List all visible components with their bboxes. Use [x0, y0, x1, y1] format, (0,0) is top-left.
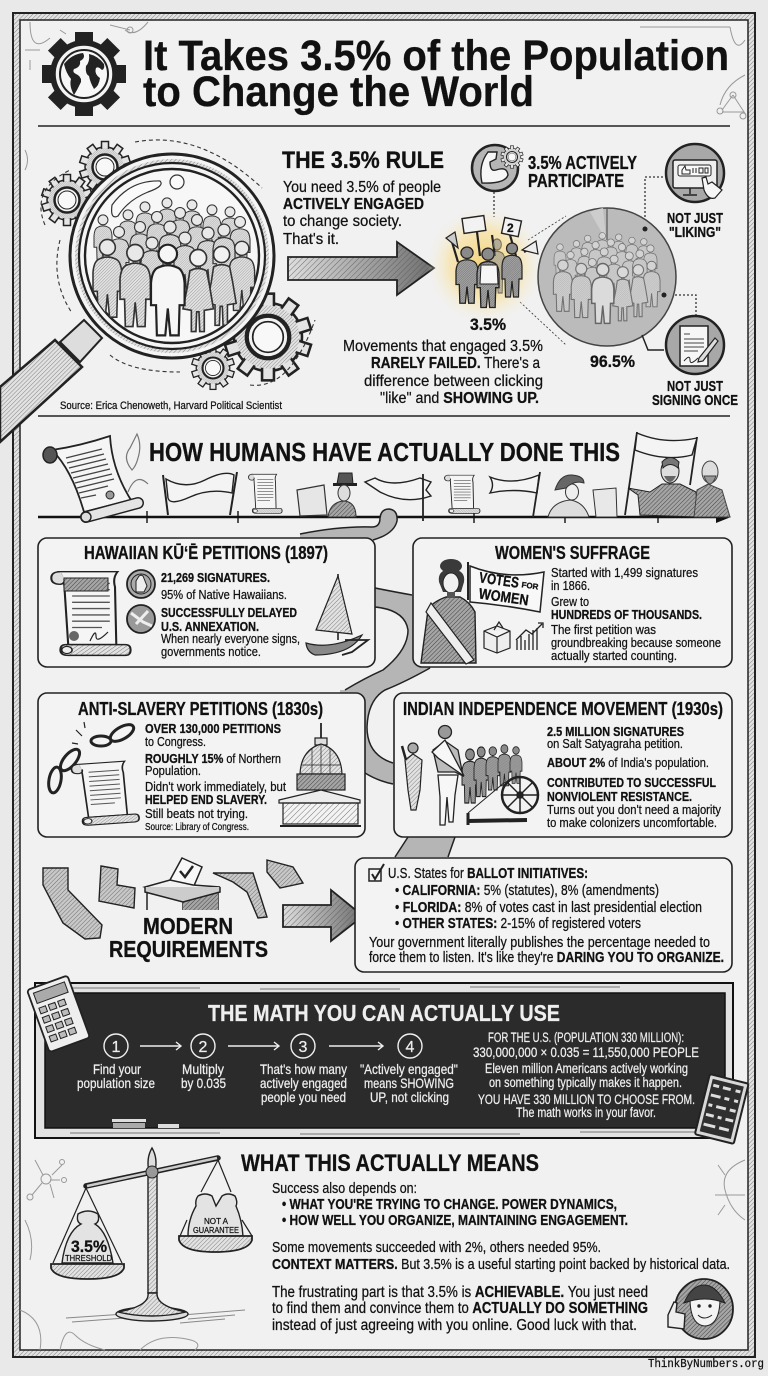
step numbers: 4: [406, 1039, 415, 1056]
icon: spinning wheel: [467, 777, 538, 825]
icon: colonial character with thumbs up: [668, 1279, 733, 1339]
label: not just signing once: SIGNING ONCE: [652, 392, 738, 409]
text block: context: Some movements succeeded with 2%, others needed 95%.: [272, 1239, 601, 1256]
calculation block: The math works in your favor.: [516, 1105, 656, 1120]
text block: depends on: • HOW WELL YOU ORGANIZE, MAINTAINING ENGAGEMENT.: [282, 1212, 628, 1229]
icon: handshake: [127, 605, 155, 633]
step captions: Find your: [93, 1061, 141, 1077]
calculation block: [473, 1030, 699, 1120]
text block: [547, 724, 721, 830]
source: Source: Erica Chenoweth, Harvard Political Scientist: [60, 400, 282, 412]
balance scale illustration: [51, 1148, 252, 1323]
heading: THE MATH YOU CAN ACTUALLY USE: [208, 1000, 560, 1026]
chalkboard panel: [27, 975, 749, 1144]
heading: ANTI-SLAVERY PETITIONS (1830s): [78, 699, 323, 719]
text block: HELPED END SLAVERY.: [145, 792, 267, 807]
text block: movements: Movements that engaged 3.5%: [343, 338, 543, 355]
step captions: actively engaged: [260, 1075, 347, 1091]
title: It Takes 3.5% of the Population: [143, 32, 729, 80]
text block: rule: [283, 179, 441, 248]
text block: SUCCESSFULLY DELAYED: [161, 605, 297, 620]
text block: movements: "like" and SHOWING UP.: [380, 390, 539, 407]
icon: left weight and pan: 3.5%: [71, 1237, 107, 1256]
heading: WOMEN'S SUFFRAGE: [495, 543, 650, 563]
panel: anti-slavery petitions: [38, 693, 365, 837]
icon: left weight and pan: [51, 1188, 124, 1279]
label: 3.5%: 3.5%: [470, 315, 506, 334]
heading: REQUIREMENTS: [109, 936, 268, 962]
banner: votes for women: [468, 562, 544, 612]
text: 3.5% actively participate: PARTICIPATE: [528, 171, 624, 191]
label: not just liking: NOT JUST: [667, 210, 723, 227]
text block: Turns out you don't need a majority: [547, 802, 721, 817]
banner: votes for women: WOMEN: [478, 586, 530, 609]
text block: rule: ACTIVELY ENGAGED: [283, 196, 424, 213]
header: logo and title: to Change the World: [143, 68, 534, 116]
text block: context: [272, 1239, 730, 1273]
panel: Hawaiian petitions: [38, 538, 375, 667]
panel: ballot initiatives: [355, 858, 732, 972]
text block: When nearly everyone signs,: [161, 631, 300, 646]
text block: groundbreaking because someone: [551, 635, 721, 650]
heading: WHAT THIS ACTUALLY MEANS: [241, 1150, 539, 1177]
text block: on Salt Satyagraha petition.: [547, 736, 683, 751]
text block: rule: to change society.: [283, 213, 402, 230]
text block: [145, 721, 286, 833]
timeline axis: [38, 511, 731, 523]
text block: U.S. ANNEXATION.: [161, 619, 259, 634]
header: logo and title: [42, 32, 729, 116]
text block: depends on: Success also depends on:: [272, 1180, 417, 1197]
label: 96.5%: 96.5%: [590, 352, 635, 371]
step captions: population size: [77, 1075, 155, 1091]
text block: frustrating part: [272, 1284, 648, 1334]
text block: The first petition was: [551, 622, 656, 637]
arrow: [283, 890, 363, 941]
text block: Your government literally publishes the percentage needed to: [369, 935, 710, 951]
text block: to Congress.: [145, 734, 206, 749]
step captions: UP, not clicking: [370, 1089, 449, 1105]
text block: Started with 1,499 signatures: [551, 565, 698, 580]
icon: abacus: [695, 1074, 749, 1144]
icon: capitol building: [279, 723, 361, 826]
calculation block: on something typically makes it happen.: [489, 1075, 682, 1090]
icon: scroll 2: [249, 474, 282, 513]
text block: ABOUT 2% of India's population.: [547, 755, 709, 770]
icon: scroll 4: [445, 475, 480, 513]
icon: gear with globe: [42, 32, 126, 116]
label: not just liking: [667, 210, 723, 241]
text block: 2.5 MILLION SIGNATURES: [547, 724, 684, 739]
icon: magnifying glass over crowd: [0, 154, 274, 442]
step captions: Multiply: [182, 1061, 224, 1077]
icon: ballot box: [484, 622, 510, 653]
icon: large scroll: [43, 436, 138, 522]
steps: [104, 1034, 422, 1058]
icon: man with document: [297, 473, 357, 517]
timeline section: [38, 432, 731, 523]
banner: votes for women: VOTES: [478, 569, 520, 592]
step captions: people you need: [261, 1089, 346, 1105]
step captions: means SHOWING: [364, 1075, 454, 1091]
winding river behind the cards: [300, 509, 455, 857]
heading: MODERN: [143, 913, 233, 939]
text block: actually started counting.: [551, 648, 677, 663]
icon: right weight and pan: NOT A: [204, 1217, 229, 1226]
icon: flag 5: [490, 472, 540, 517]
text block: • OTHER STATES: 2-15% of registered voters: [395, 916, 641, 932]
icon: protesters 3.5%: 2: [507, 221, 514, 235]
calculation block: 330,000,000 × 0.035 = 11,550,000 PEOPLE: [473, 1045, 699, 1060]
heading: [109, 913, 268, 962]
text block: U.S. States for BALLOT INITIATIVES:: [388, 866, 588, 882]
text block: Didn't work immediately, but: [145, 779, 286, 794]
step numbers: 3: [299, 1039, 308, 1056]
icon: marchers: [462, 745, 522, 803]
icon: companion walker: [402, 743, 422, 810]
text block: ROUGHLY 15% of Northern: [145, 751, 281, 766]
heading: HOW HUMANS HAVE ACTUALLY DONE THIS: [149, 437, 620, 467]
icon: calculator: [27, 975, 90, 1052]
icon: petition scroll: [71, 760, 139, 826]
label: not just signing once: NOT JUST: [667, 378, 723, 395]
step captions: That's how many: [260, 1061, 347, 1077]
icon: thumbs-up on monitor: [666, 144, 724, 202]
icon: ballot box: [145, 858, 220, 910]
label: not just liking: "LIKING": [669, 224, 721, 241]
icon: broken chain: [47, 721, 136, 794]
icon: flexed arm and gear: [472, 145, 523, 191]
connector lines: [494, 177, 696, 345]
icon: signed document: [666, 316, 724, 374]
text block: Population.: [145, 763, 201, 778]
text: 3.5% actively participate: [528, 153, 637, 191]
icon: flame sketch: [126, 434, 148, 492]
calculation block: Eleven million Americans actively working: [485, 1061, 688, 1076]
heading: THE 3.5% RULE: [282, 147, 444, 174]
chalk and eraser: [112, 1119, 179, 1128]
text block: rule: That's it.: [283, 231, 339, 248]
heading: HAWAIIAN KŪʻĒ PETITIONS (1897): [84, 543, 328, 563]
text block: Grew to: [551, 594, 589, 609]
text block: • FLORIDA: 8% of votes cast in last presidential election: [395, 900, 702, 916]
text block: movements: RARELY FAILED. There's a: [371, 355, 540, 372]
text block: governments notice.: [161, 644, 261, 659]
text block: frustrating part: to find them and convince them to ACTUALLY DO SOMETHING: [272, 1300, 648, 1317]
step numbers: 2: [199, 1039, 208, 1056]
text block: frustrating part: The frustrating part is that 3.5% is ACHIEVABLE. You just need: [272, 1284, 648, 1301]
icon: suffragette: [548, 475, 617, 517]
text block: Still beats not trying.: [145, 806, 248, 821]
text block: depends on: [272, 1180, 628, 1229]
text block: in 1866.: [551, 578, 590, 593]
icon: left weight and pan: THRESHOLD: [65, 1253, 112, 1263]
step numbers: 1: [112, 1039, 121, 1056]
text block: Source: Library of Congress.: [145, 822, 249, 833]
icon: protesters 3.5%: [427, 207, 543, 323]
calculation block: FOR THE U.S. (POPULATION 330 MILLION):: [488, 1030, 684, 1045]
shadow hatching: [66, 1310, 245, 1323]
icon: flag 1: [163, 472, 237, 515]
icon: marching men and banner: [625, 432, 730, 517]
text block: [369, 866, 724, 966]
text block: rule: You need 3.5% of people: [283, 179, 441, 196]
icon: suffragette with sash: [421, 559, 476, 664]
icon: right weight and pan: [179, 1160, 252, 1252]
icon: right weight and pan: GUARANTEE: [193, 1226, 239, 1235]
pole: [422, 474, 424, 521]
text block: depends on: • WHAT YOU'RE TRYING TO CHANGE. POWER DYNAMICS,: [282, 1196, 617, 1213]
icon: state maps: [43, 860, 303, 939]
panel: the 3.5% rule: [0, 140, 738, 442]
icon: rising chart: [516, 623, 543, 650]
text: 3.5% actively participate: 3.5% ACTIVELY: [528, 153, 637, 173]
banner: votes for women: FOR: [521, 580, 539, 592]
step numbers: [112, 1039, 415, 1056]
text block: CONTRIBUTED TO SUCCESSFUL: [547, 775, 716, 790]
text block: 95% of Native Hawaiians.: [161, 587, 287, 602]
text block: OVER 130,000 PETITIONS: [145, 721, 281, 736]
text block: 21,269 SIGNATURES.: [161, 570, 270, 585]
icon: scroll with band: [51, 572, 131, 655]
icon: flag 3: [365, 478, 431, 500]
icon: checkbox: [369, 864, 384, 881]
step captions: "Actively engaged": [360, 1061, 458, 1077]
text block: movements: [343, 338, 543, 407]
icon: Gandhi walking: [432, 726, 464, 825]
step captions: by 0.035: [181, 1075, 226, 1091]
text block: frustrating part: instead of just agreeing with you online. Good luck with that.: [272, 1317, 637, 1334]
label: not just signing once: [652, 378, 738, 409]
icon: hand: [127, 570, 155, 598]
text block: force them to listen. It's like they're DARING YOU TO ORGANIZE.: [369, 950, 724, 966]
section: what this actually means: [241, 1150, 733, 1339]
modern requirements section: [43, 858, 732, 972]
calculation block: YOU HAVE 330 MILLION TO CHOOSE FROM.: [478, 1092, 695, 1107]
icon: surrounding gears: [41, 140, 315, 389]
arrow: [288, 242, 434, 295]
icon: beam: [86, 1158, 218, 1186]
icon: pole and base: [116, 1148, 188, 1321]
panel: Indian independence: [394, 693, 732, 837]
text block: NONVIOLENT RESISTANCE.: [547, 789, 692, 804]
step captions: [77, 1061, 458, 1105]
text block: to make colonizers uncomfortable.: [547, 815, 717, 830]
text block: HUNDREDS OF THOUSANDS.: [551, 607, 702, 622]
text block: • CALIFORNIA: 5% (statutes), 8% (amendments): [395, 883, 659, 899]
chart: population circle: [538, 208, 676, 350]
text block: [551, 565, 721, 663]
text block: [161, 570, 300, 659]
text block: movements: difference between clicking: [364, 373, 543, 390]
panel: women's suffrage: [413, 538, 732, 667]
icon: outrigger canoe: [306, 574, 368, 655]
